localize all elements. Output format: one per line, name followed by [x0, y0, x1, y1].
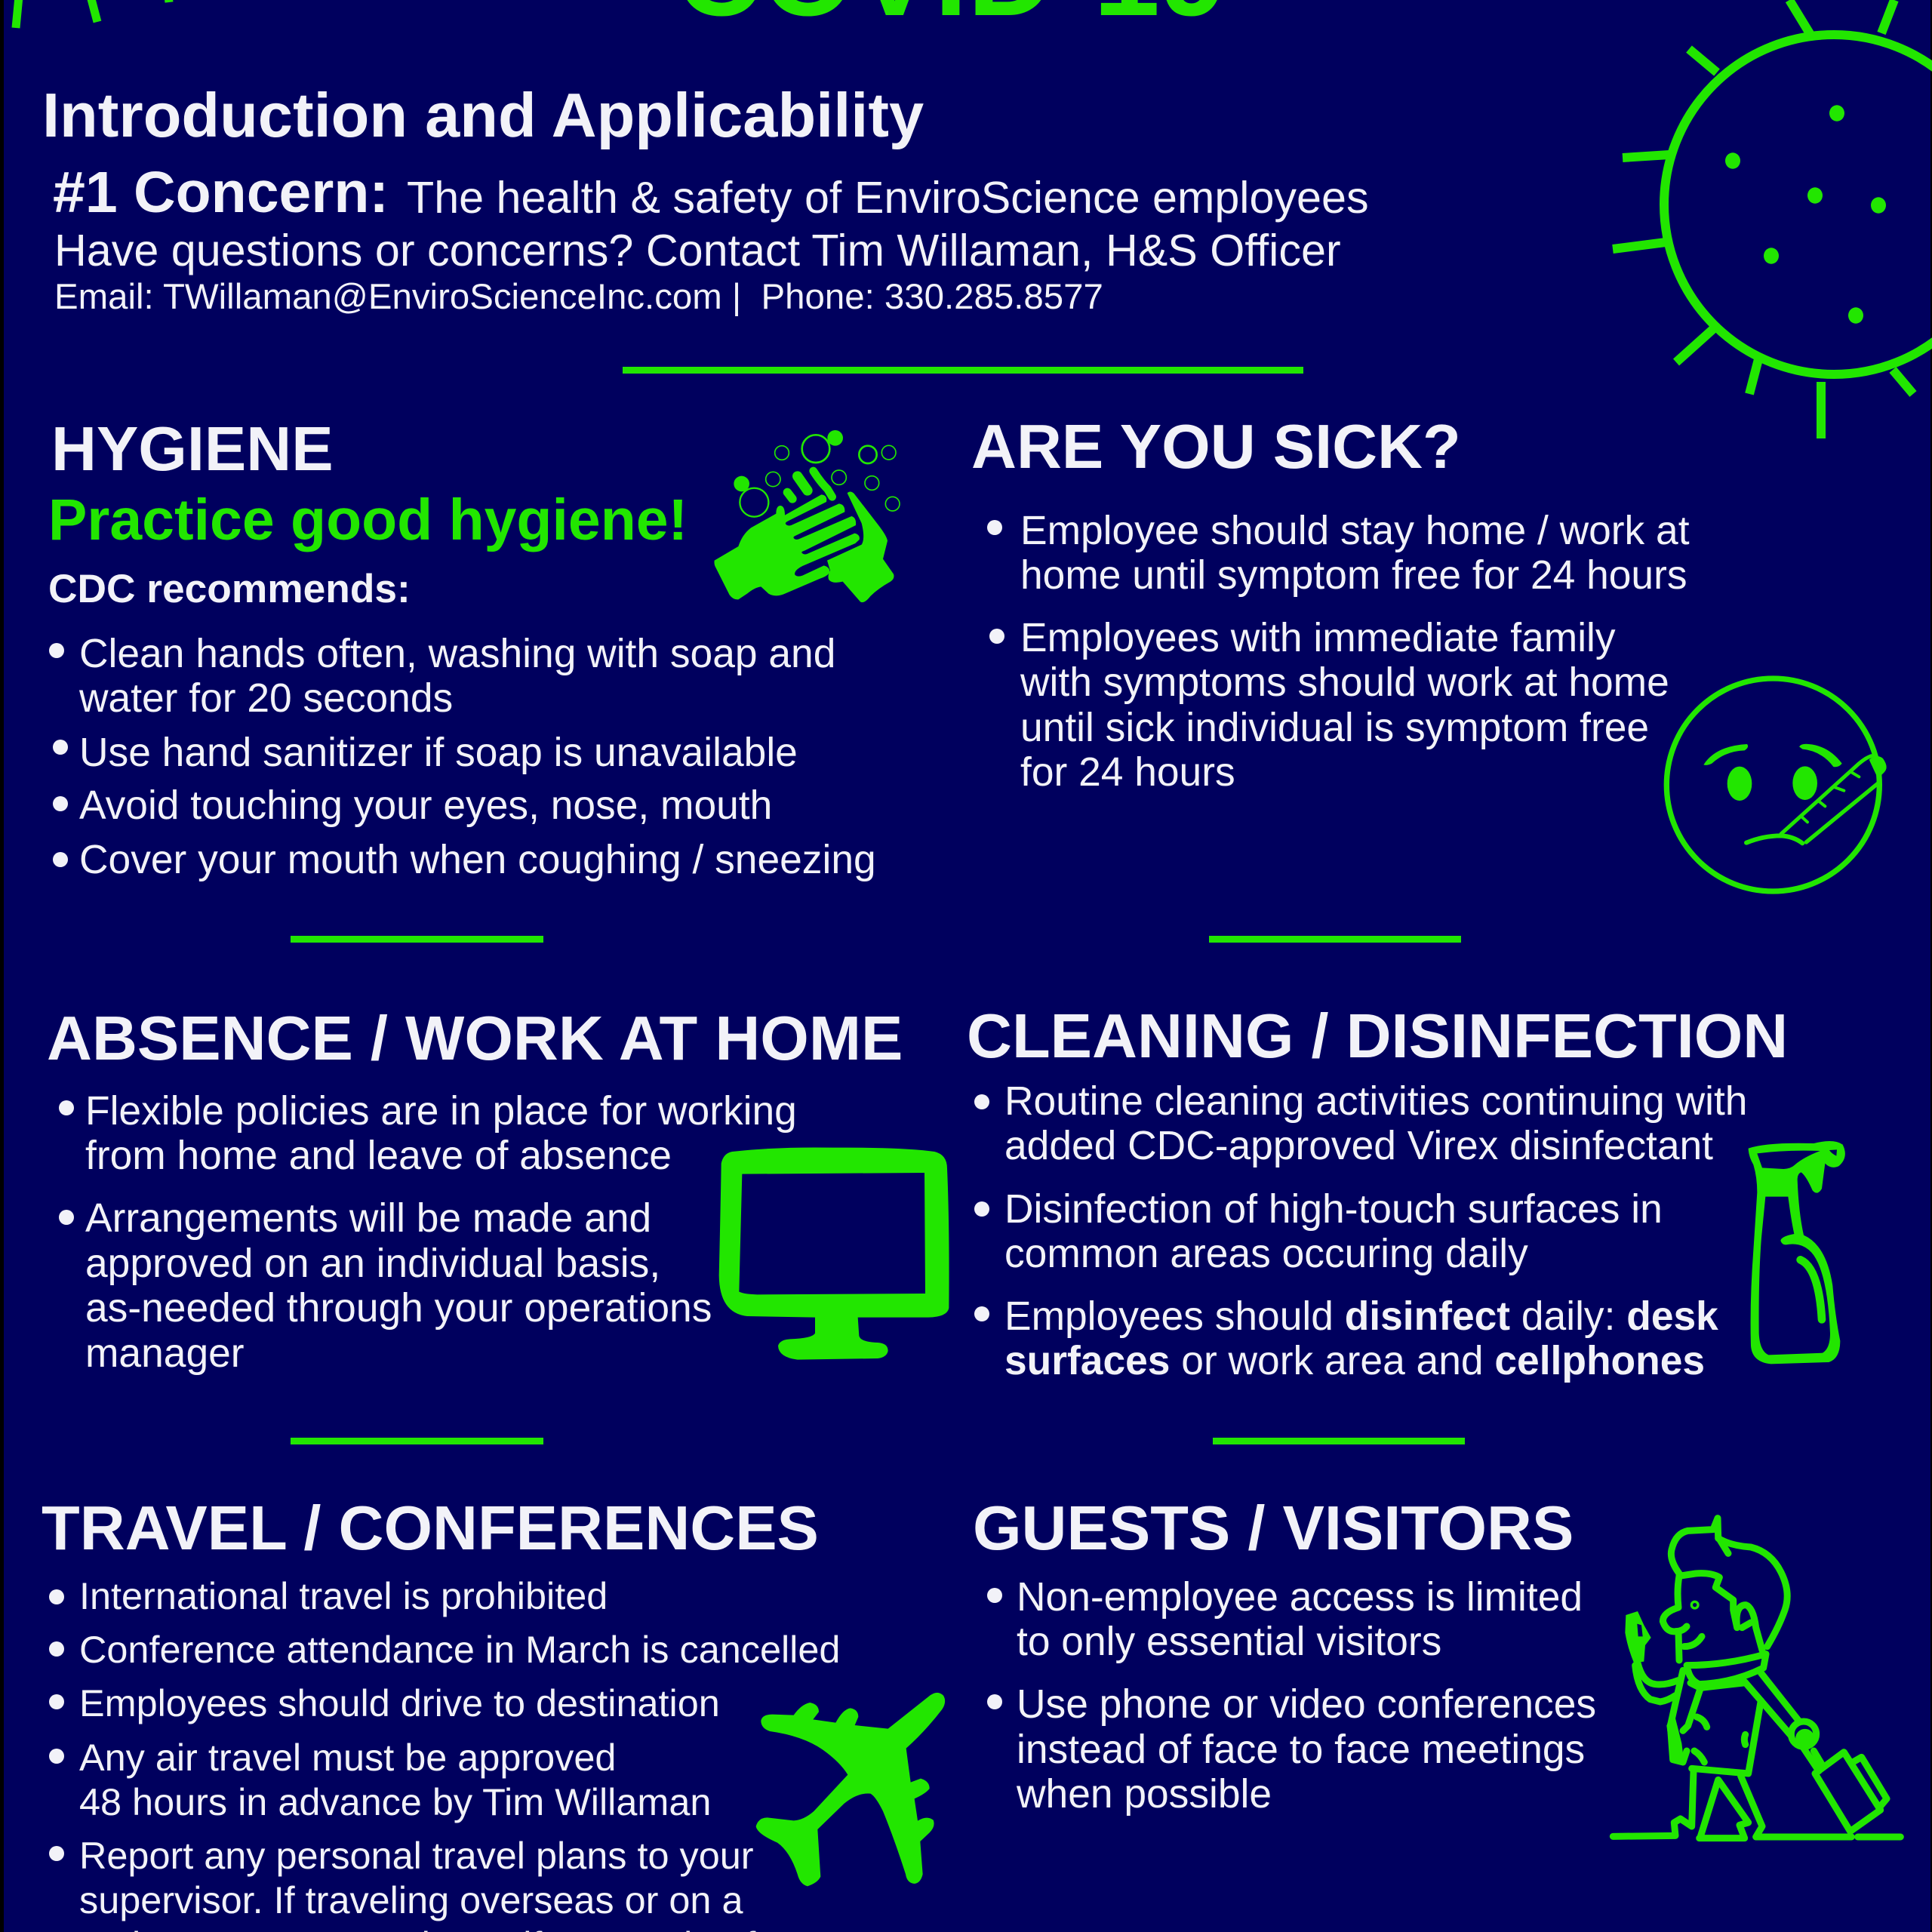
bullet list: hygiene	[49, 632, 876, 882]
bullet list: guests: Use phone or video conferences	[1017, 1682, 1596, 1727]
bullet list: absence: manager	[85, 1331, 245, 1376]
bullet list: absence	[59, 1089, 797, 1376]
bullet list: guests: Non-employee access is limited	[1017, 1575, 1583, 1620]
icon: washing hands	[714, 430, 900, 602]
icon: virus top left	[16, 0, 169, 28]
bullet list: travel: supervisor. If traveling overseas or on a	[79, 1878, 743, 1921]
panel: introduction	[42, 80, 1369, 317]
icon: computer monitor	[719, 1147, 949, 1360]
bullet list: cleaning: added CDC-approved Virex disinfectant	[1004, 1124, 1713, 1168]
panel: cleaning / disinfection	[967, 1001, 1845, 1383]
bullet list: absence: approved on an individual basis,	[85, 1241, 660, 1286]
bullet list: travel: Report any personal travel plans to your	[79, 1834, 754, 1877]
bullet list: travel: Employees should drive to destination	[79, 1681, 720, 1724]
bullet list: sick guidance: Employee should stay home / work at	[1020, 509, 1690, 553]
bullet list: travel	[49, 1574, 840, 1932]
bullet list: hygiene: Clean hands often, washing with soap and	[79, 632, 835, 676]
icon: traveler with suitcase	[1613, 1518, 1900, 1838]
icon: spray bottle	[1749, 1141, 1845, 1364]
icon: sick face with thermometer	[1666, 678, 1887, 891]
bullet list: cleaning: Disinfection of high-touch surfaces in	[1004, 1187, 1663, 1232]
bullet list: sick guidance: for 24 hours	[1020, 750, 1235, 795]
bullet list: sick guidance: with symptoms should work at home	[1020, 660, 1669, 705]
bullet list: absence: from home and leave of absence	[85, 1134, 672, 1178]
heading: guests / visitors: GUESTS / VISITORS	[973, 1493, 1574, 1563]
bullet list: hygiene: Cover your mouth when coughing / sneezing	[79, 838, 876, 882]
heading: absence / work at home: ABSENCE / WORK AT HOME	[47, 1003, 903, 1073]
text: email and phone: Email: TWillaman@EnviroScienceInc.com | Phone: 330.285.8577	[54, 277, 1103, 317]
bullet list: guests: instead of face to face meetings	[1017, 1727, 1585, 1772]
bullet list: guests	[987, 1575, 1596, 1817]
bullet list: absence: Arrangements will be made and	[85, 1196, 651, 1241]
icon: airplane	[756, 1693, 945, 1886]
bullet list: hygiene: Use hand sanitizer if soap is unavailable	[79, 731, 798, 775]
bullet list: cleaning: Routine cleaning activities continuing with	[1004, 1079, 1747, 1124]
panel: guests / visitors	[973, 1493, 1900, 1838]
bullet list: cleaning: Employees should disinfect daily: desk	[1004, 1294, 1718, 1339]
bullet list: absence: Flexible policies are in place for working	[85, 1089, 797, 1134]
panel: are you sick	[971, 411, 1887, 891]
bullet list: cleaning	[974, 1079, 1747, 1383]
bullet list: sick guidance	[987, 509, 1690, 795]
heading: introduction and applicability: Introduction and Applicability	[42, 80, 924, 150]
text: cdc recommends: CDC recommends:	[48, 567, 411, 611]
bullet list: travel: International travel is prohibited	[79, 1574, 608, 1617]
bullet list: cleaning: surfaces or work area and cellphones	[1004, 1339, 1705, 1383]
panel: absence / work at home	[47, 1003, 949, 1376]
heading: are you sick: ARE YOU SICK?	[971, 411, 1461, 481]
bullet list: sick guidance: Employees with immediate family	[1020, 616, 1616, 660]
subheading: practice good hygiene: Practice good hygiene!	[48, 488, 688, 552]
bullet list: sick guidance: home until symptom free for 24 hours	[1020, 553, 1687, 598]
bullet list: travel: Conference attendance in March is cancelled	[79, 1628, 840, 1671]
bullet list: hygiene: Avoid touching your eyes, nose, mouth	[79, 783, 772, 828]
panel: hygiene	[48, 414, 900, 882]
bullet list: hygiene: water for 20 seconds	[78, 676, 453, 721]
icon: virus top right	[1613, 0, 1932, 438]
text: number one concern: #1 Concern:	[53, 160, 389, 225]
bullet list: guests: to only essential visitors	[1017, 1620, 1441, 1664]
panel: travel / conferences	[42, 1493, 945, 1932]
bullet list: cleaning: common areas occuring daily	[1004, 1232, 1528, 1276]
bullet list: travel: Any air travel must be approved	[79, 1736, 616, 1779]
heading: travel / conferences: TRAVEL / CONFERENCES	[42, 1493, 819, 1563]
text: number one concern: The health & safety of EnviroScience employees	[407, 172, 1369, 223]
bullet list: absence: as-needed through your operations	[85, 1286, 712, 1331]
heading: cleaning / disinfection: CLEANING / DISINFECTION	[967, 1001, 1788, 1071]
bullet list: travel: 48 hours in advance by Tim Willaman	[79, 1780, 711, 1823]
bullet list: sick guidance: until sick individual is symptom free	[1020, 706, 1649, 750]
bullet list: guests: when possible	[1016, 1772, 1272, 1817]
heading: hygiene: HYGIENE	[51, 414, 334, 484]
text: contact line: Have questions or concerns? Contact Tim Willaman, H&S Officer	[54, 225, 1341, 275]
